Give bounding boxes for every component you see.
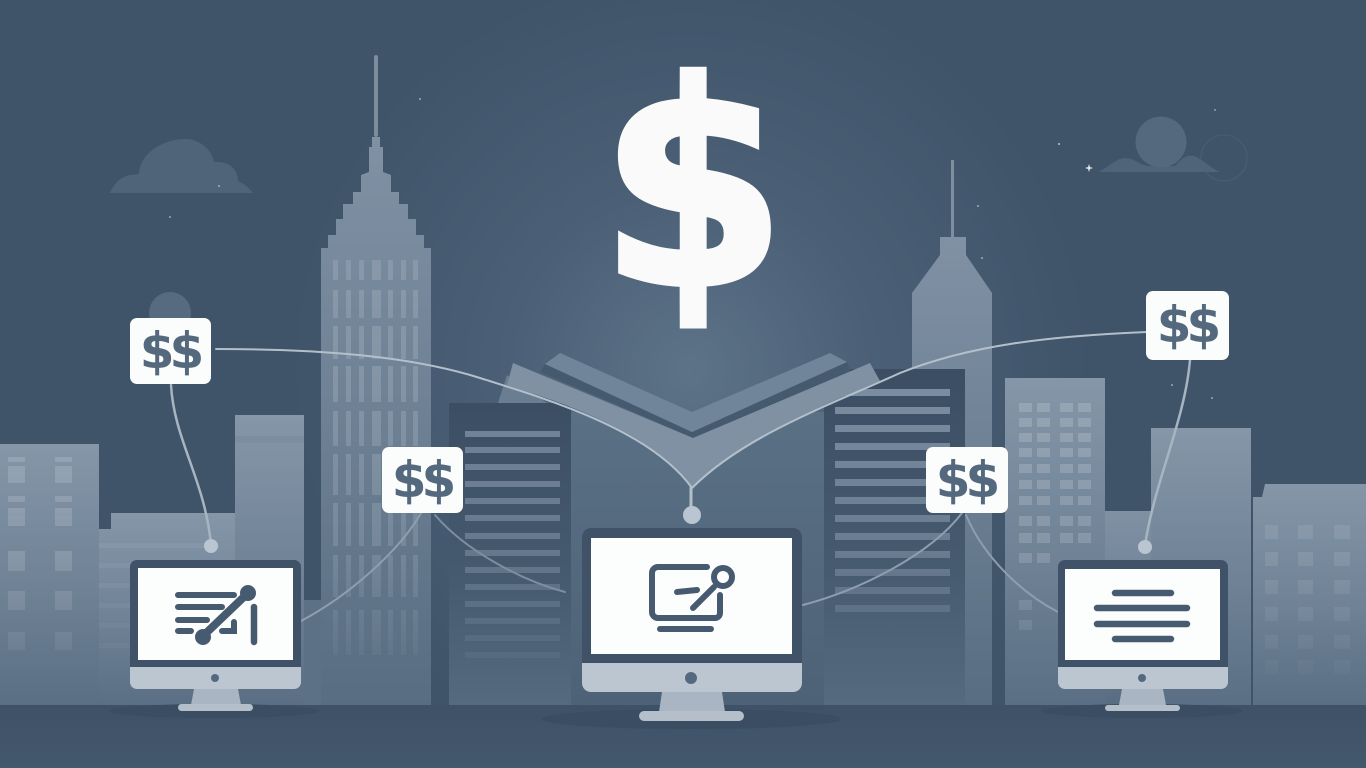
monitor: left (109, 539, 319, 718)
left building (0, 444, 99, 705)
icon: text lines (1097, 593, 1187, 639)
tag: upper right: $$ (1157, 296, 1218, 354)
tag: lower right: $$ (936, 451, 997, 509)
line: right tag to center (692, 332, 1146, 488)
tag: lower right (926, 447, 1008, 513)
center backdrop building (571, 412, 824, 705)
main left tower (321, 55, 431, 705)
line: center drop (690, 488, 692, 508)
stars (169, 98, 1216, 399)
dark building right of center (824, 369, 965, 705)
cloud and moon right (1098, 116, 1247, 181)
connector lines (171, 332, 1190, 621)
shaded strip beside the left monitor (304, 600, 321, 705)
open book (498, 353, 880, 488)
line: third tag to right monitor (966, 515, 1058, 612)
big dollar sign: $ (600, 23, 786, 351)
line: right tag to right monitor (1145, 360, 1190, 545)
line: third tag to center monitor (803, 513, 962, 605)
cloud left (110, 139, 253, 193)
tag: upper left: $$ (140, 322, 201, 380)
monitor: center (541, 506, 841, 729)
dark building left of center (449, 403, 571, 705)
monitor: right (1042, 540, 1242, 718)
right windowed building (1005, 378, 1105, 705)
building behind left monitor (235, 415, 304, 705)
icon: chart with slider (178, 587, 254, 643)
tall block right (1151, 428, 1251, 705)
tag: upper left (130, 318, 211, 384)
low building (99, 513, 241, 705)
right tower (912, 160, 992, 705)
line: first tag to left monitor (171, 385, 211, 545)
line: second tag to left monitor (301, 513, 421, 621)
icon: screen with key (652, 567, 732, 629)
line: first tag to center (216, 349, 692, 488)
tag: lower left: $$ (392, 451, 453, 509)
tag: lower left (382, 447, 463, 513)
ground (0, 705, 1366, 768)
line: second tag to center monitor (435, 515, 565, 592)
connecting low block (1105, 511, 1151, 705)
tag: upper right (1146, 291, 1229, 360)
moon behind first tag (149, 292, 191, 334)
far right building (1253, 484, 1366, 705)
